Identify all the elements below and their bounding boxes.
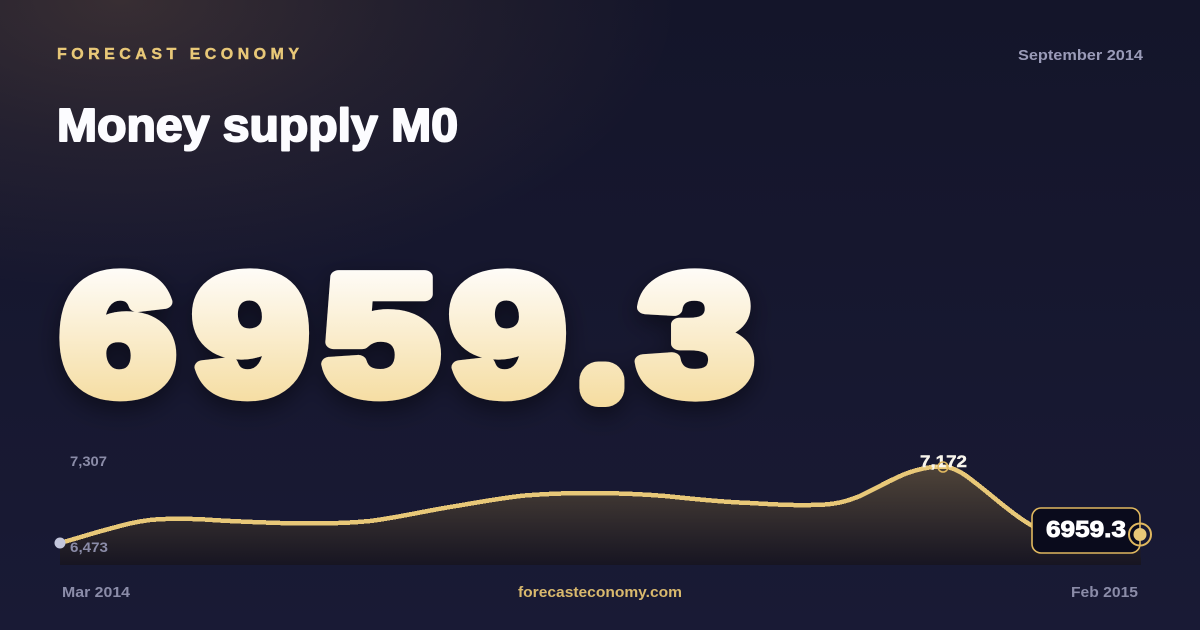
peak label: 7,172 (920, 452, 967, 471)
brand label: FORECAST ECONOMY (57, 46, 299, 63)
end date: Feb 2015 (1071, 584, 1138, 601)
trend line (60, 466, 1040, 543)
start marker (54, 538, 66, 548)
area fill (60, 466, 1141, 565)
big value: . (595, 343, 609, 399)
big value: 6959 (60, 241, 565, 428)
current value badge (1032, 508, 1140, 553)
big value: 3 (638, 241, 753, 428)
start date: Mar 2014 (62, 584, 131, 601)
title: Money supply M0 (57, 99, 458, 151)
website: forecasteconomy.com (518, 584, 682, 601)
line chart (54, 452, 1151, 565)
axis max label: 7,307 (70, 454, 107, 469)
axis min label: 6,473 (70, 540, 109, 555)
end marker (1129, 524, 1151, 546)
peak marker (938, 462, 948, 472)
date: September 2014 (1018, 47, 1144, 64)
current value badge: 6959.3 (1046, 516, 1126, 542)
